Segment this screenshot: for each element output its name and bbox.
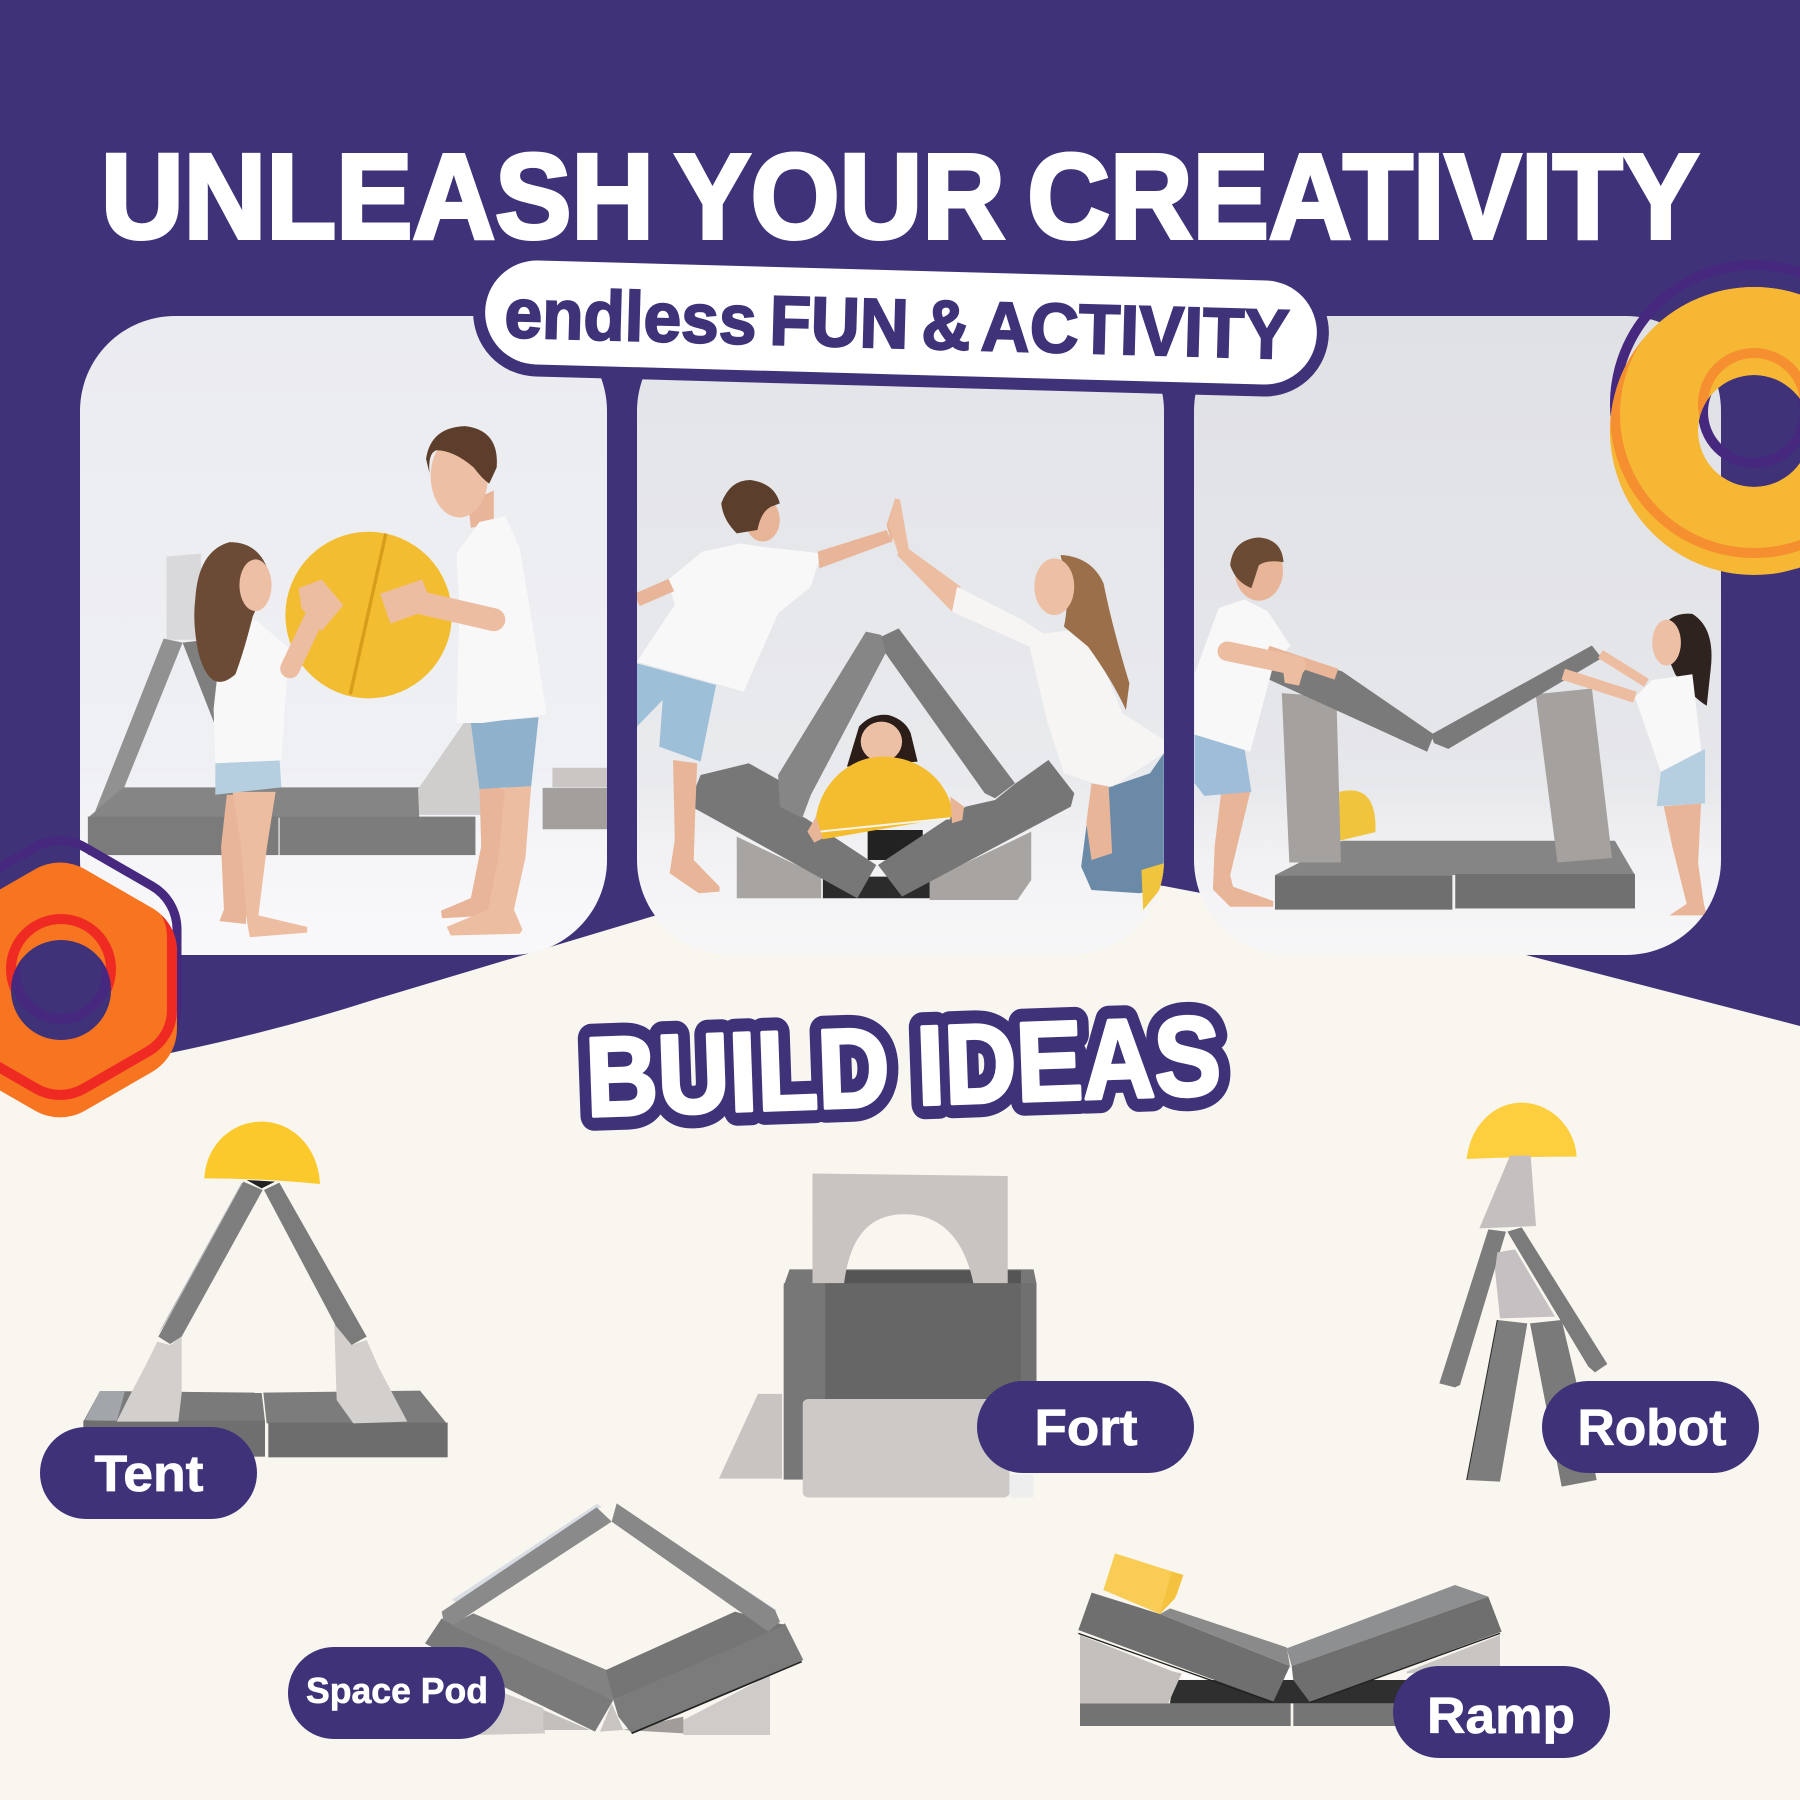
label: ramp: [1393, 1666, 1610, 1758]
subtitle pill: endless FUN & ACTIVITY: [504, 274, 1290, 374]
cream lower section: [0, 873, 1800, 1800]
label: robot: [1542, 1381, 1759, 1473]
heading: build ideas: BUILD IDEAS: [584, 993, 1223, 1140]
label: fort: [977, 1381, 1194, 1473]
build: ramp: [1078, 1553, 1502, 1726]
label: fort: Fort: [1034, 1399, 1138, 1456]
panel: kids with yellow circle: [80, 316, 608, 955]
label: tent: [40, 1427, 257, 1519]
panel: family high five: [637, 316, 1164, 955]
title: UNLEASH YOUR CREATIVITY: [101, 128, 1699, 264]
decorative hexagon nut: [0, 841, 177, 1117]
label: ramp: Ramp: [1427, 1687, 1575, 1744]
label: robot: Robot: [1578, 1399, 1727, 1456]
label: space pod: [288, 1647, 505, 1739]
label: space pod: Space Pod: [306, 1670, 488, 1711]
build: robot: [1439, 1103, 1607, 1487]
decorative yellow donut: [1610, 265, 1800, 575]
build: fort: [719, 1173, 1036, 1497]
label: tent: Tent: [94, 1445, 204, 1502]
build: space pod: [425, 1503, 803, 1735]
build: tent: [83, 1122, 448, 1457]
heading: build ideas: BUILD IDEAS: [584, 993, 1223, 1140]
panel: kids building an M: [1194, 316, 1721, 955]
